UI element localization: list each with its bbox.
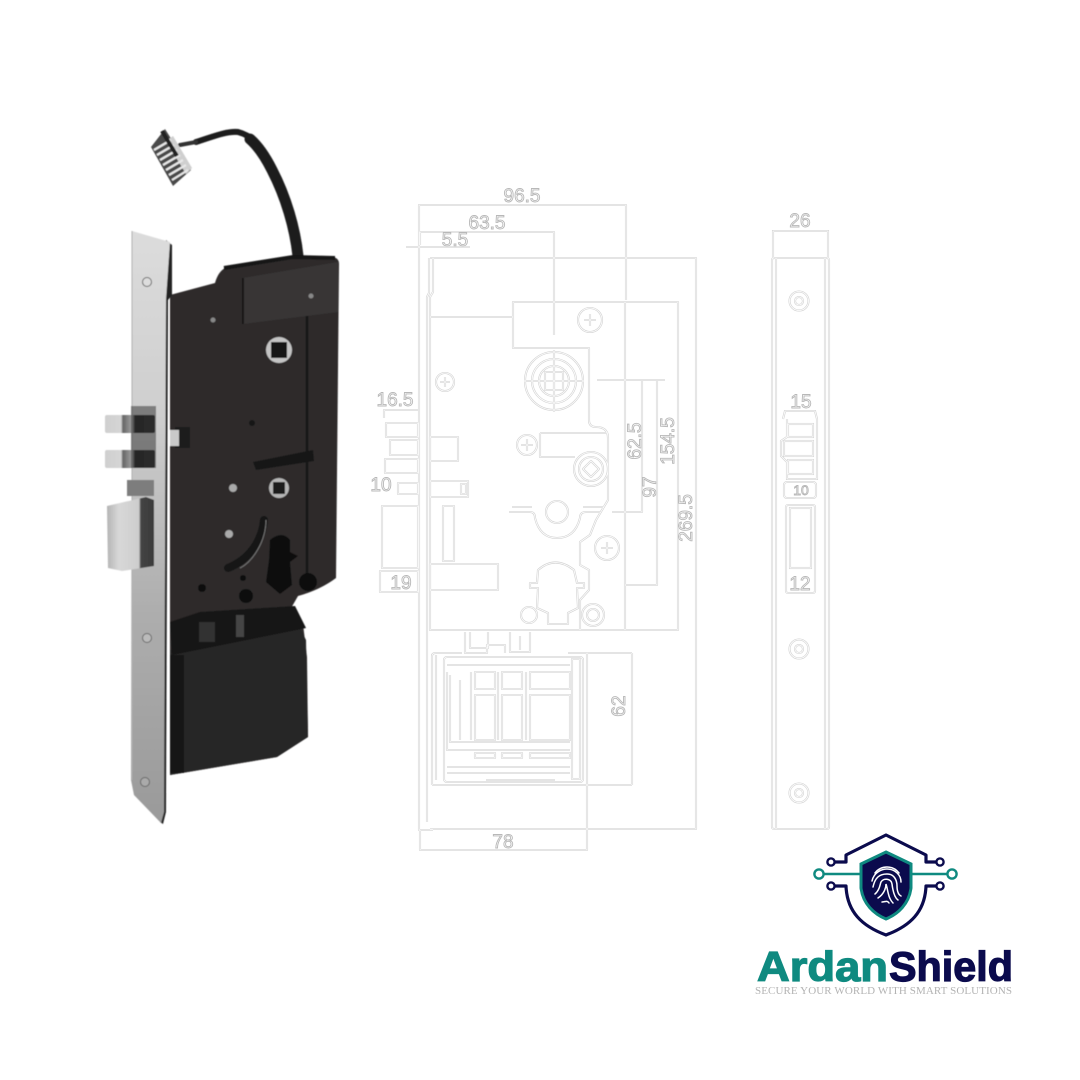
plate holes <box>790 292 808 802</box>
screws <box>436 308 619 560</box>
plate outline <box>772 231 829 829</box>
case outline <box>419 247 678 830</box>
side view labels: 10 <box>793 482 809 498</box>
side view labels <box>789 211 812 595</box>
faceplate <box>131 231 172 824</box>
logo shield icon <box>814 835 957 935</box>
logo tagline: SECURE YOUR WORLD WITH SMART SOLUTIONS <box>755 985 1012 997</box>
dimension labels: 154.5 <box>658 417 679 465</box>
dimension labels: 10 <box>370 475 392 496</box>
battery module <box>432 632 587 785</box>
dimension labels: 5.5 <box>442 230 468 251</box>
logo wordmark: Ardan <box>757 943 888 990</box>
lock body <box>170 257 339 775</box>
mid cam and box <box>509 433 608 538</box>
side view labels: 15 <box>790 392 812 413</box>
fingerprint <box>872 867 901 903</box>
spindle gear <box>524 350 584 412</box>
technical drawing: front view <box>380 205 696 850</box>
product photo: mortise lock <box>105 129 339 824</box>
plate cut-outs <box>781 411 817 593</box>
connector <box>151 129 192 186</box>
dimension labels: 63.5 <box>469 213 505 234</box>
logo wordmark: Shield <box>889 943 1013 990</box>
dimension lines <box>406 205 696 850</box>
latches and bolt <box>105 406 156 571</box>
spindle holes and slots <box>170 294 317 603</box>
dimension labels: 97 <box>640 476 661 498</box>
technical drawing: side faceplate view <box>772 231 829 829</box>
side view labels: 26 <box>789 211 811 232</box>
keyhole and rings <box>521 562 604 626</box>
side view labels: 12 <box>789 574 811 595</box>
dimension labels: 78 <box>492 832 514 853</box>
dimension labels: 96.5 <box>504 186 540 207</box>
dimension labels: 19 <box>390 573 412 594</box>
dimension labels <box>370 186 697 853</box>
dimension labels: 16.5 <box>377 390 413 411</box>
logo wordmark <box>757 943 1013 990</box>
dimension labels: 62.5 <box>625 423 646 459</box>
latch boxes <box>380 410 498 592</box>
dimension labels: 62 <box>609 695 630 717</box>
dimension labels: 269.5 <box>676 494 697 542</box>
logo: ArdanShield <box>755 835 1013 997</box>
cable <box>180 132 299 256</box>
